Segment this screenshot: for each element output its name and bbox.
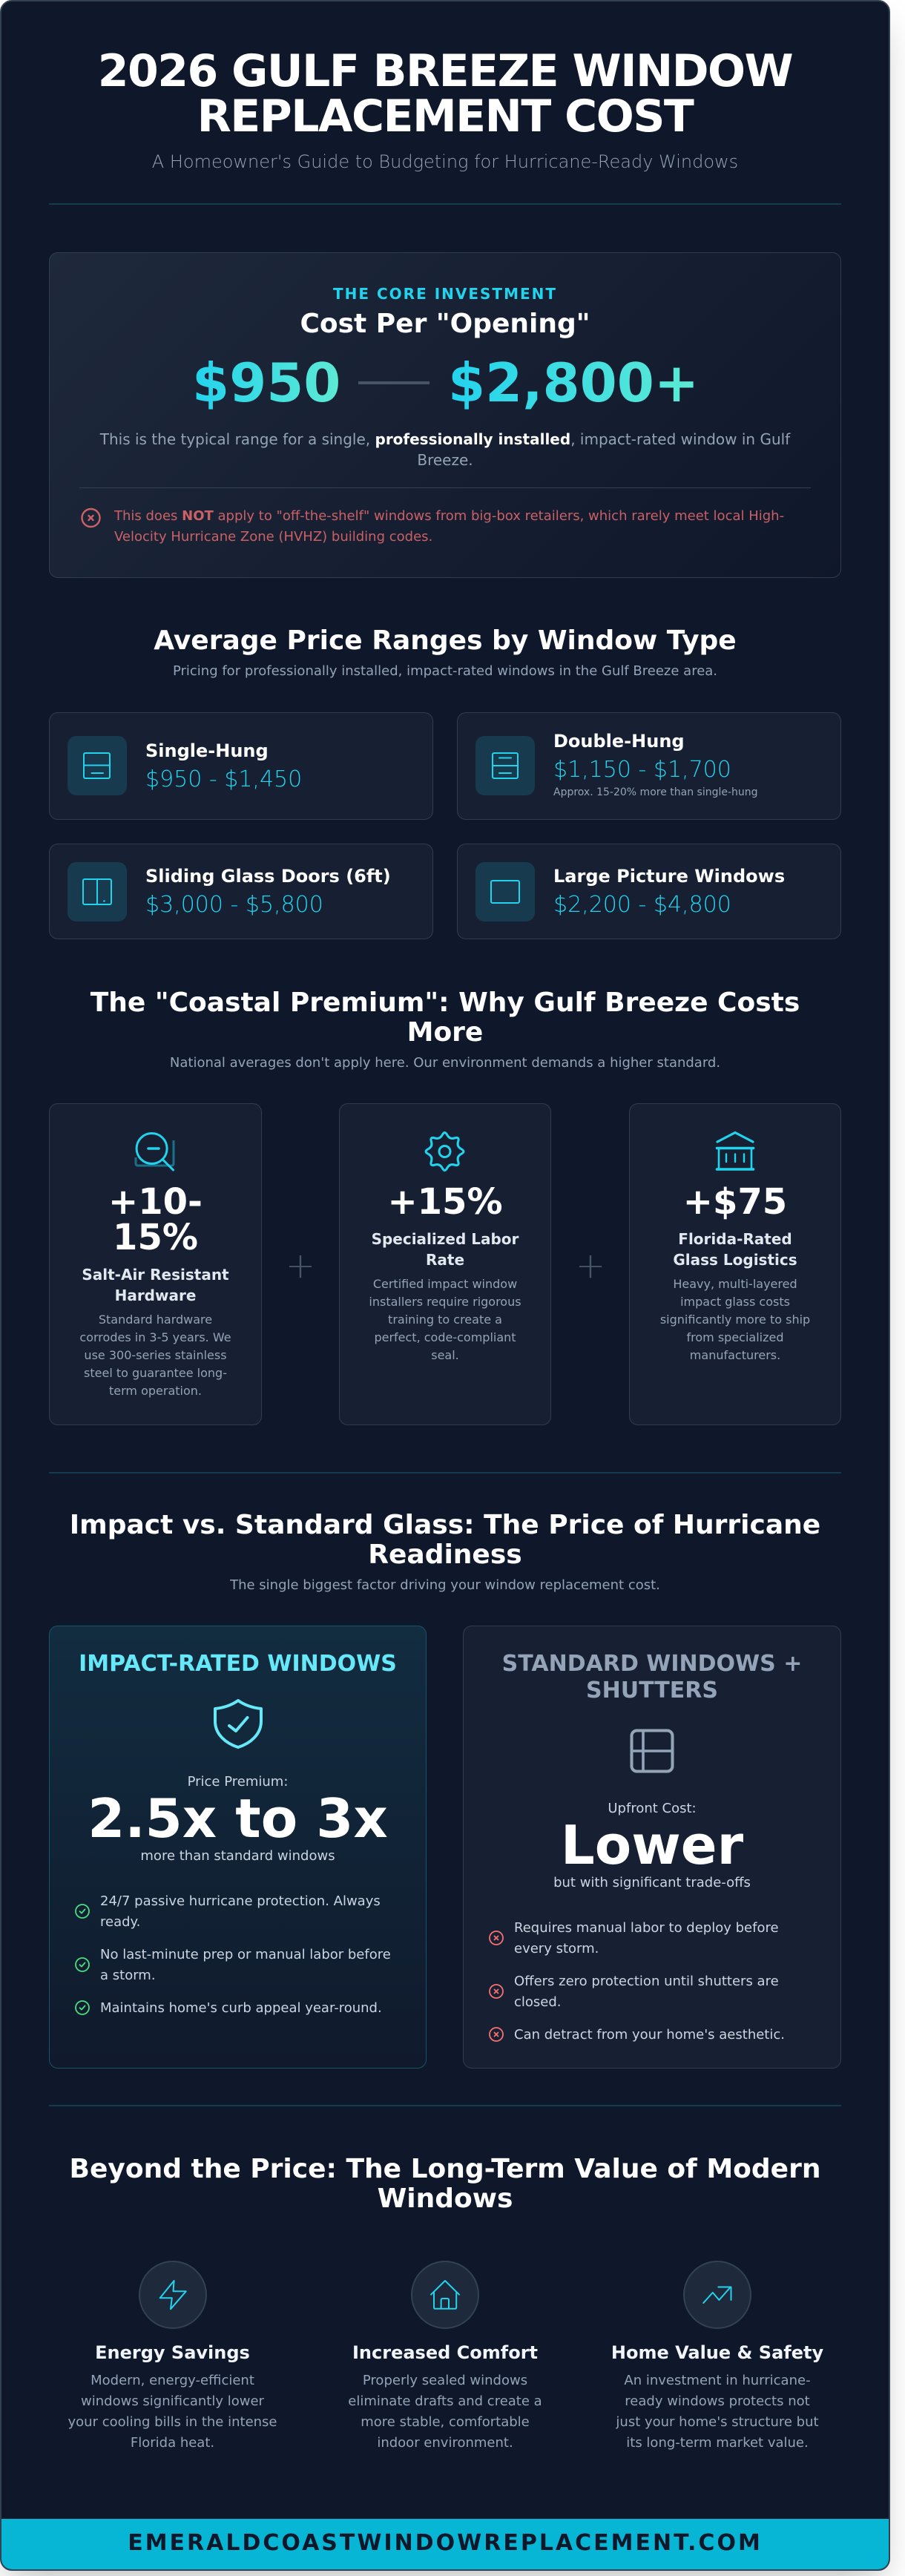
label: Specialized Labor [372,1230,519,1248]
icon: bank [715,1131,755,1171]
description: Standard hardware [99,1312,212,1327]
footer band [0,2519,890,2571]
description [369,1277,521,1362]
heading: long-term value [70,2154,820,2214]
item: closed. [514,1994,562,2010]
description: Heavy, multi-layered [673,1277,797,1291]
description: your cooling bills in the intense [68,2414,277,2430]
description: steel to guarantee long- [84,1366,227,1380]
value [108,1181,203,1258]
description: impact glass costs [680,1295,790,1309]
description: eliminate drafts and create a [348,2393,542,2409]
price description: Breeze. [417,451,473,469]
description: installers require rigorous [369,1295,521,1309]
panel title [502,1651,802,1703]
price: $3,000 - $5,800 [145,892,323,918]
label: Glass Logistics [673,1251,797,1269]
icon: trend arrow [683,2261,751,2329]
card: double-hung [457,712,841,820]
description: seal. [431,1348,459,1362]
icon: check [75,1957,90,1972]
icon: picture window [475,862,535,921]
heading: price ranges: Average Price Ranges by Window Type [154,625,737,656]
value: +15% [387,1181,503,1223]
description: Modern, energy-efficient [90,2373,254,2388]
name: Large Picture Windows [553,866,785,887]
plus sign: + [286,1245,315,1287]
heading: long-term value: Beyond the Price: The Long-Term Value of Modern [70,2154,820,2184]
big value: Lower [561,1814,743,1876]
panel: core investment [49,252,841,578]
description: ready windows protects not [625,2393,810,2409]
item: Can detract from your home's aesthetic. [514,2027,785,2043]
label [372,1230,519,1269]
icon: gear [424,1131,464,1172]
subheading: coastal premium: National averages don't apply here. Our environment demands a higher standard. [170,1055,720,1071]
item: every storm. [514,1941,599,1956]
name: Single-Hung [145,740,269,761]
card: picture windows [457,844,841,939]
item [100,1947,391,1983]
value: +$75 [683,1181,787,1223]
panel title: SHUTTERS [586,1678,718,1703]
heading: coastal premium [90,988,800,1048]
panel title: IMPACT-RATED WINDOWS [79,1651,397,1677]
description: term operation. [109,1384,202,1398]
item: No last-minute prep or manual labor before [100,1947,391,1962]
icon: x [489,1984,504,1999]
icon: x [489,2027,504,2042]
benefit list [75,1893,391,2016]
website url: EMERALDCOASTWINDOWREPLACEMENT.COM [128,2530,763,2556]
icon: check [75,1904,90,1919]
icon: check [75,2000,90,2015]
cost label: Upfront Cost: [608,1801,697,1816]
description: windows significantly lower [81,2393,264,2409]
item: Maintains home's curb appeal year-round. [100,2000,382,2016]
panel: standard windows + shutters [463,1626,841,2069]
high price: $2,800+ [448,352,699,414]
warning text: Velocity Hurricane Zone (HVHZ) building codes. [114,529,432,545]
icon: double-hung window [475,736,535,795]
drawback list [489,1920,785,2043]
icon: single-hung window [68,736,127,795]
warning text [114,508,784,545]
description: more stable, comfortable [361,2414,530,2430]
item [514,1974,779,2010]
price: $950 - $1,450 [145,766,302,792]
panel: impact-rated windows [49,1626,427,2069]
description: use 300-series stainless [84,1348,227,1362]
description: significantly more to ship [660,1312,810,1327]
item: 24/7 passive hurricane protection. Always [100,1893,381,1909]
description [79,1312,231,1398]
card: sliding doors [49,844,433,939]
item: a storm. [100,1968,156,1983]
icon: house [411,2261,479,2329]
title: 2026 GULF BREEZE WINDOW [98,45,792,97]
label [673,1230,797,1269]
description: Properly sealed windows [363,2373,527,2388]
title: Home Value & Safety [611,2342,823,2363]
description: from specialized [687,1330,783,1344]
price: $2,200 - $4,800 [553,892,731,918]
icon: magnifier [135,1132,175,1172]
title: Increased Comfort [352,2342,538,2363]
warning text: This does NOT apply to "off-the-shelf" windows from big-box retailers, which rarely meet local High- [114,508,784,524]
description: Certified impact window [373,1277,517,1291]
header [98,45,792,172]
description: its long-term market value. [626,2435,809,2451]
heading: impact vs standard: Readiness [368,1540,522,1570]
icon: sliding door [68,862,127,921]
note: Approx. 15-20% more than single-hung [553,786,758,798]
description [660,1277,810,1362]
low price: $950 [192,352,340,414]
label: Hardware [115,1287,196,1304]
item: Requires manual labor to deploy before [514,1920,779,1936]
price range [192,352,699,414]
description: manufacturers. [690,1348,780,1362]
icon: shutter window [631,1729,674,1773]
price description [99,430,791,469]
card: glass logistics [629,1103,841,1425]
description: training to create a [388,1312,502,1327]
title [98,45,792,142]
subheading: price ranges: Pricing for professionally installed, impact-rated windows in the Gulf Breeze area. [173,663,717,679]
icon: x [489,1931,504,1945]
description: just your home's structure but [616,2414,819,2430]
subtitle: A Homeowner's Guide to Budgeting for Hurricane-Ready Windows [152,151,738,172]
benefit: increased comfort [348,2261,542,2451]
caption: more than standard windows [140,1848,335,1864]
value: 15% [113,1217,198,1258]
price: $1,150 - $1,700 [553,757,731,783]
description: perfect, code-compliant [374,1330,516,1344]
icon: lightning bolt [138,2261,206,2329]
icon: x circle [81,507,101,528]
item: ready. [100,1914,140,1930]
dash connector [358,381,430,384]
label [82,1266,229,1304]
card: labor rate [339,1103,551,1425]
label: Salt-Air Resistant [82,1266,229,1284]
benefit: home value [611,2261,823,2451]
heading: impact vs standard [70,1510,820,1570]
item [100,1893,381,1930]
icon: shield check [214,1699,263,1749]
panel heading: Cost Per "Opening" [300,309,590,339]
plus sign: + [576,1245,605,1287]
price label: Price Premium: [188,1774,288,1790]
title: REPLACEMENT COST [197,91,693,142]
heading: impact vs standard: Impact vs. Standard Glass: The Price of Hurricane [70,1510,820,1540]
value: +10- [108,1181,203,1223]
big value: 2.5x to 3x [88,1787,388,1850]
price description: This is the typical range for a single, professionally installed, impact-rated window in Gulf [100,430,790,448]
description [348,2373,542,2451]
item [514,1920,779,1956]
benefit: energy savings [68,2261,277,2451]
name: Double-Hung [553,731,685,752]
heading: coastal premium: The "Coastal Premium": Why Gulf Breeze Costs [90,988,800,1018]
label: Rate [426,1251,464,1269]
description: indoor environment. [377,2435,513,2451]
title: Energy Savings [95,2342,250,2363]
card: salt-air hardware [49,1103,262,1425]
subheading: impact vs standard: The single biggest factor driving your window replacement cost. [230,1577,660,1593]
description [68,2373,277,2451]
item: Offers zero protection until shutters are [514,1974,779,1989]
description: corrodes in 3-5 years. We [79,1330,231,1344]
label: Florida-Rated [678,1230,792,1248]
heading: long-term value: Windows [378,2184,513,2214]
name: Sliding Glass Doors (6ft) [145,866,391,887]
heading: coastal premium: More [407,1017,483,1048]
panel title: STANDARD WINDOWS + [502,1651,802,1677]
caption: but with significant trade-offs [553,1875,751,1890]
card: single-hung [49,712,433,820]
warning note [81,507,784,545]
description: Florida heat. [131,2435,214,2451]
description: An investment in hurricane- [624,2373,811,2388]
eyebrow label: THE CORE INVESTMENT [333,285,557,303]
description [606,2370,829,2454]
